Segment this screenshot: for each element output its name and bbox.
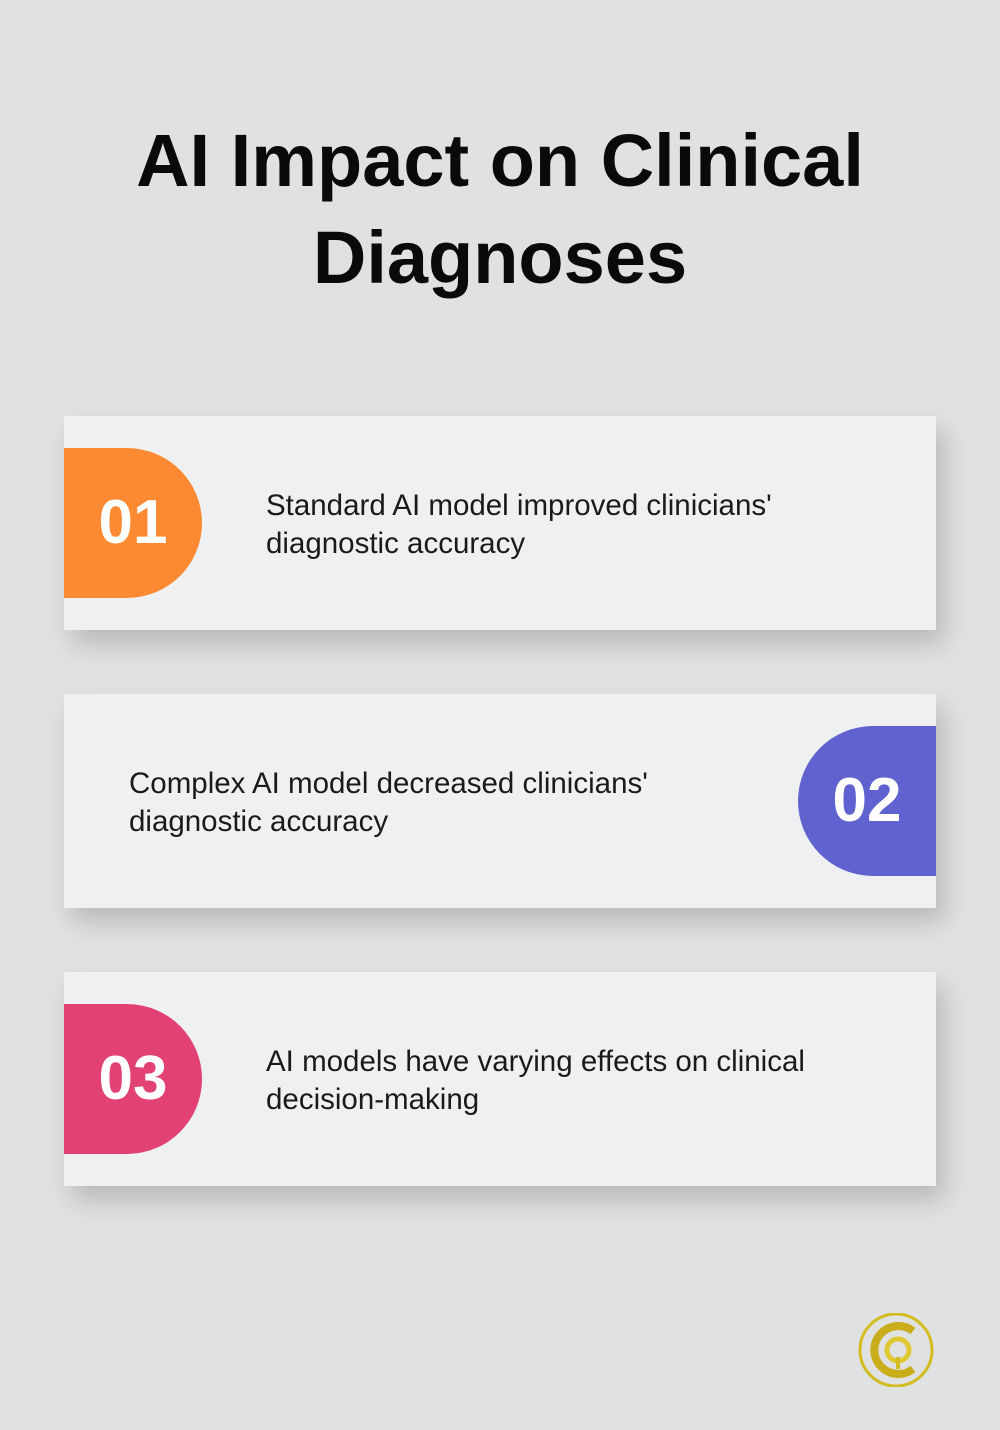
- card 1: [64, 416, 936, 630]
- logo: [858, 1313, 934, 1387]
- text 1: Standard AI model improved clinicians' diagnostic accuracy: [266, 489, 772, 560]
- text 3: AI models have varying effects on clinical decision-making: [266, 1045, 805, 1116]
- title: Diagnoses: [313, 216, 687, 299]
- card 3: [64, 972, 936, 1186]
- badge 03: 03: [99, 1044, 167, 1113]
- badge 02: [798, 726, 936, 876]
- badge 01: 01: [99, 488, 167, 557]
- title: AI Impact on Clinical: [136, 119, 864, 202]
- badge 03: [64, 1004, 202, 1154]
- badge 02: 02: [833, 766, 901, 835]
- badge 01: [64, 448, 202, 598]
- title: [136, 119, 864, 299]
- card 2: [64, 694, 936, 908]
- text 2: Complex AI model decreased clinicians' diagnostic accuracy: [129, 767, 648, 838]
